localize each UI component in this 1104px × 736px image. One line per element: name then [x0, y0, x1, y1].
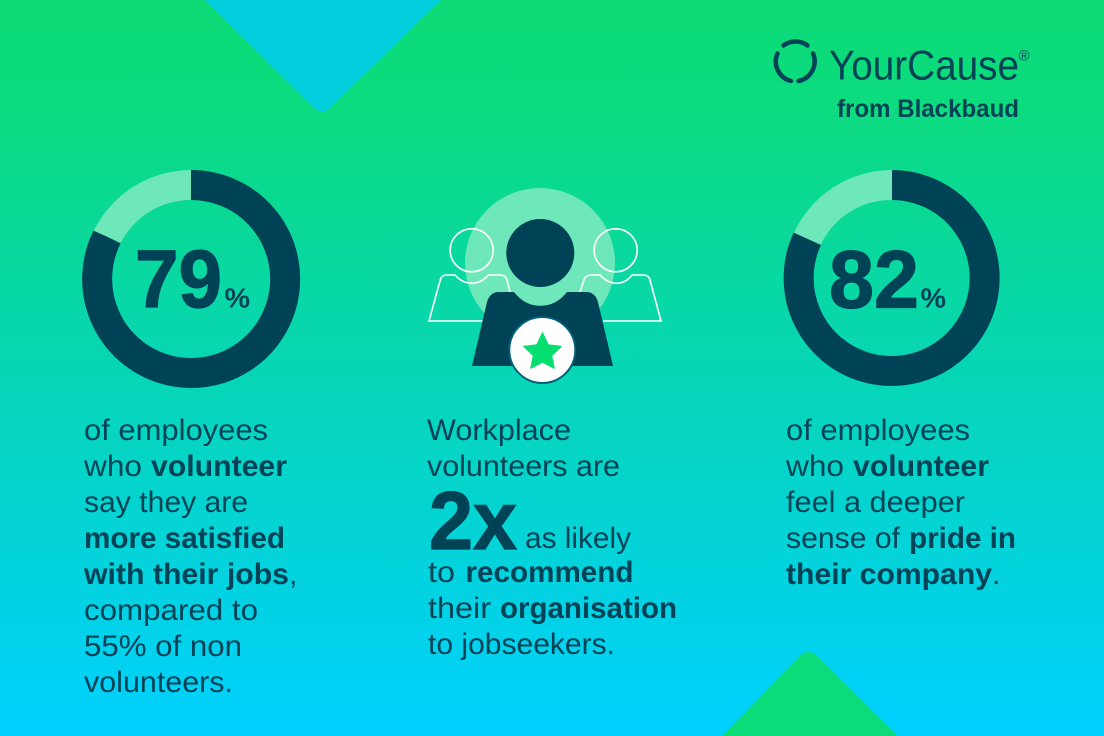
text block: 79% description: with their jobs [83, 558, 289, 591]
text block: 82% description: their company [786, 558, 992, 591]
outlined person right [580, 229, 661, 321]
text block: 2x description: recommend [466, 556, 634, 589]
text block: 2x description: to [428, 556, 455, 589]
logo: YourCause from Blackbaud: from Blackbaud [837, 95, 1019, 123]
donut chart: 82% [794, 170, 985, 371]
logo: YourCause from Blackbaud [776, 41, 1030, 123]
icon: volunteers group with star badge [429, 188, 661, 383]
logo: YourCause from Blackbaud: ® [1018, 48, 1030, 64]
text block: 2x description: as likely [525, 522, 631, 555]
text block: 2x description: 2x [429, 474, 517, 567]
text block: 82% description: volunteer [853, 450, 989, 483]
text block: 79% description: of employees [84, 414, 268, 447]
text block: 82% description: of employees [786, 414, 970, 447]
text block: 79% description: say they are [84, 486, 248, 519]
text block: 82% description [785, 414, 1016, 591]
text block: 82% description: who [785, 450, 844, 483]
text block: 82% description: pride in [909, 522, 1016, 555]
text block: 79% description: , [289, 558, 297, 591]
text block: 79% description: volunteers. [84, 666, 233, 699]
text block: 2x description: volunteers are [427, 450, 620, 483]
text block: 2x description: organisation [500, 592, 677, 625]
text block: 79% description: volunteer [151, 450, 287, 483]
text block: 82% description: . [992, 558, 1000, 591]
donut chart: 79%: 79 [135, 234, 222, 325]
text block: 79% description: more satisfied [84, 522, 285, 555]
main person [506, 219, 574, 287]
text block: 82% description: feel a deeper [786, 486, 965, 519]
text block: 79% description: who [83, 450, 142, 483]
bottom triangle decoration [722, 652, 898, 736]
text block: 79% description [83, 414, 297, 699]
donut chart: 79%: % [224, 282, 250, 314]
text block: 79% description: 55% of non [84, 630, 242, 663]
donut chart: 79% [94, 170, 285, 373]
top triangle decoration [205, 0, 441, 112]
text block: 82% description: sense of [786, 522, 901, 555]
star badge [509, 317, 575, 383]
text block: 2x description: their [428, 592, 491, 625]
text block: 2x description: Workplace [427, 414, 571, 447]
halo circle [465, 188, 615, 338]
text block: 2x description [427, 414, 677, 661]
donut chart: 82%: 82 [829, 234, 919, 326]
logo: YourCause from Blackbaud: YourCause [829, 42, 1019, 88]
text block: 79% description: compared to [84, 594, 258, 627]
donut chart: 82%: % [920, 282, 946, 314]
icon: logo ring [776, 41, 815, 81]
outlined person left [429, 229, 510, 321]
text block: 2x description: to jobseekers. [428, 628, 615, 661]
